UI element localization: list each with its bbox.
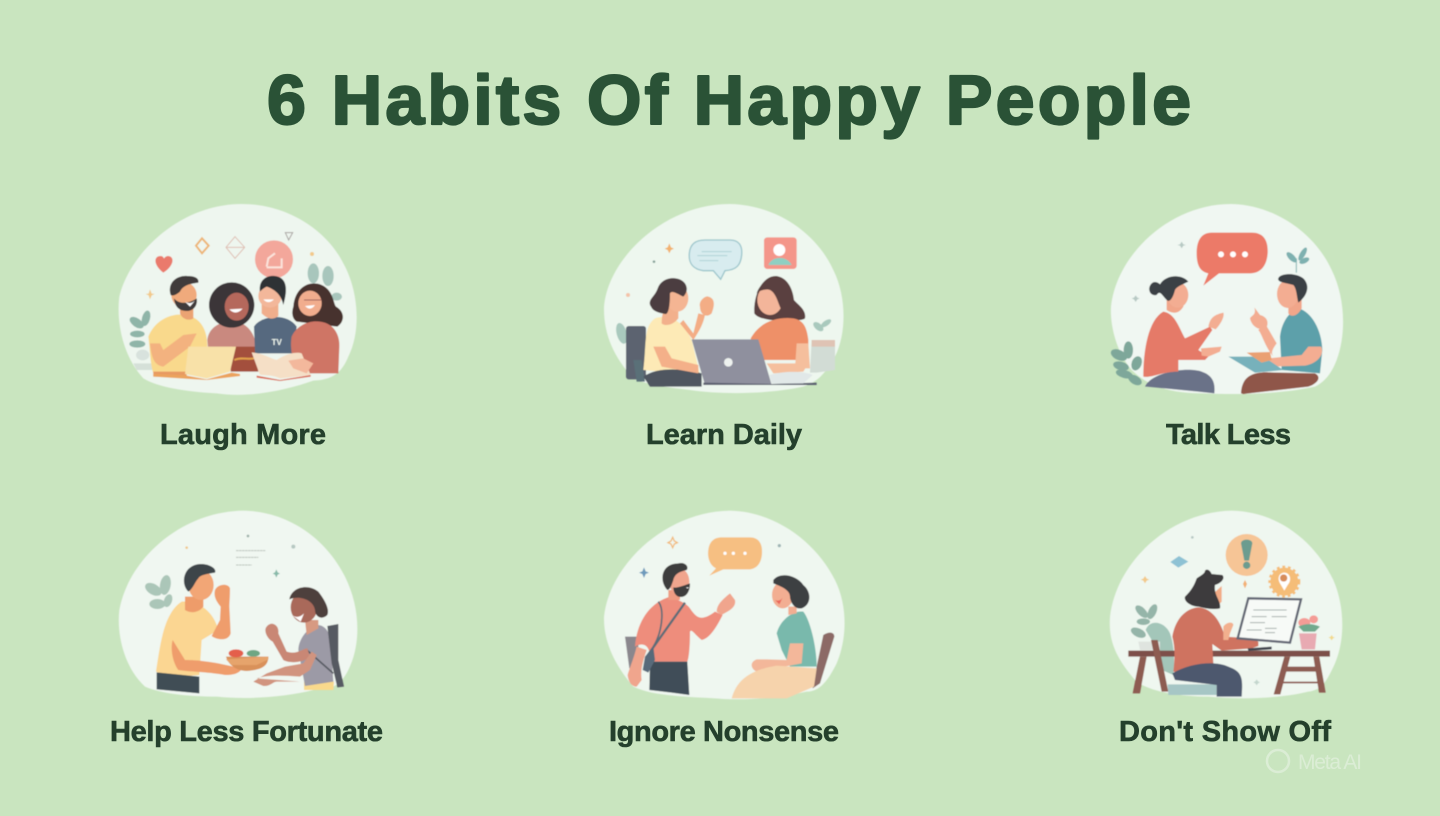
panel: Learn Daily bbox=[604, 204, 844, 451]
label: Help Less Fortunate bbox=[110, 716, 383, 748]
illustration: man handing food bowl to woman bbox=[119, 511, 357, 698]
panel: Talk Less bbox=[1109, 204, 1343, 451]
illustration: two people in conversation bbox=[1109, 204, 1343, 394]
illustration: four friends laughing: TV bbox=[272, 338, 283, 347]
watermark: Meta AI bbox=[1267, 750, 1362, 774]
panel: Help Less Fortunate bbox=[110, 511, 383, 748]
panel: Ignore Nonsense bbox=[604, 511, 845, 748]
illustration: two women with a laptop bbox=[604, 204, 844, 393]
panel: Don't Show Off bbox=[1110, 511, 1342, 748]
label: Laugh More bbox=[160, 419, 326, 451]
label: Talk Less bbox=[1166, 419, 1291, 451]
illustration: four friends laughing bbox=[119, 204, 357, 395]
label: Learn Daily bbox=[646, 419, 802, 451]
title: 6 Habits Of Happy People bbox=[267, 61, 1191, 139]
illustration: woman working at desk bbox=[1110, 511, 1342, 698]
label: Ignore Nonsense bbox=[609, 716, 839, 748]
illustration: bearded man talking to seated woman bbox=[604, 511, 845, 699]
label: Don't Show Off bbox=[1119, 716, 1331, 748]
watermark: Meta AI: Meta AI bbox=[1298, 751, 1362, 774]
panel: Laugh More bbox=[119, 204, 357, 451]
